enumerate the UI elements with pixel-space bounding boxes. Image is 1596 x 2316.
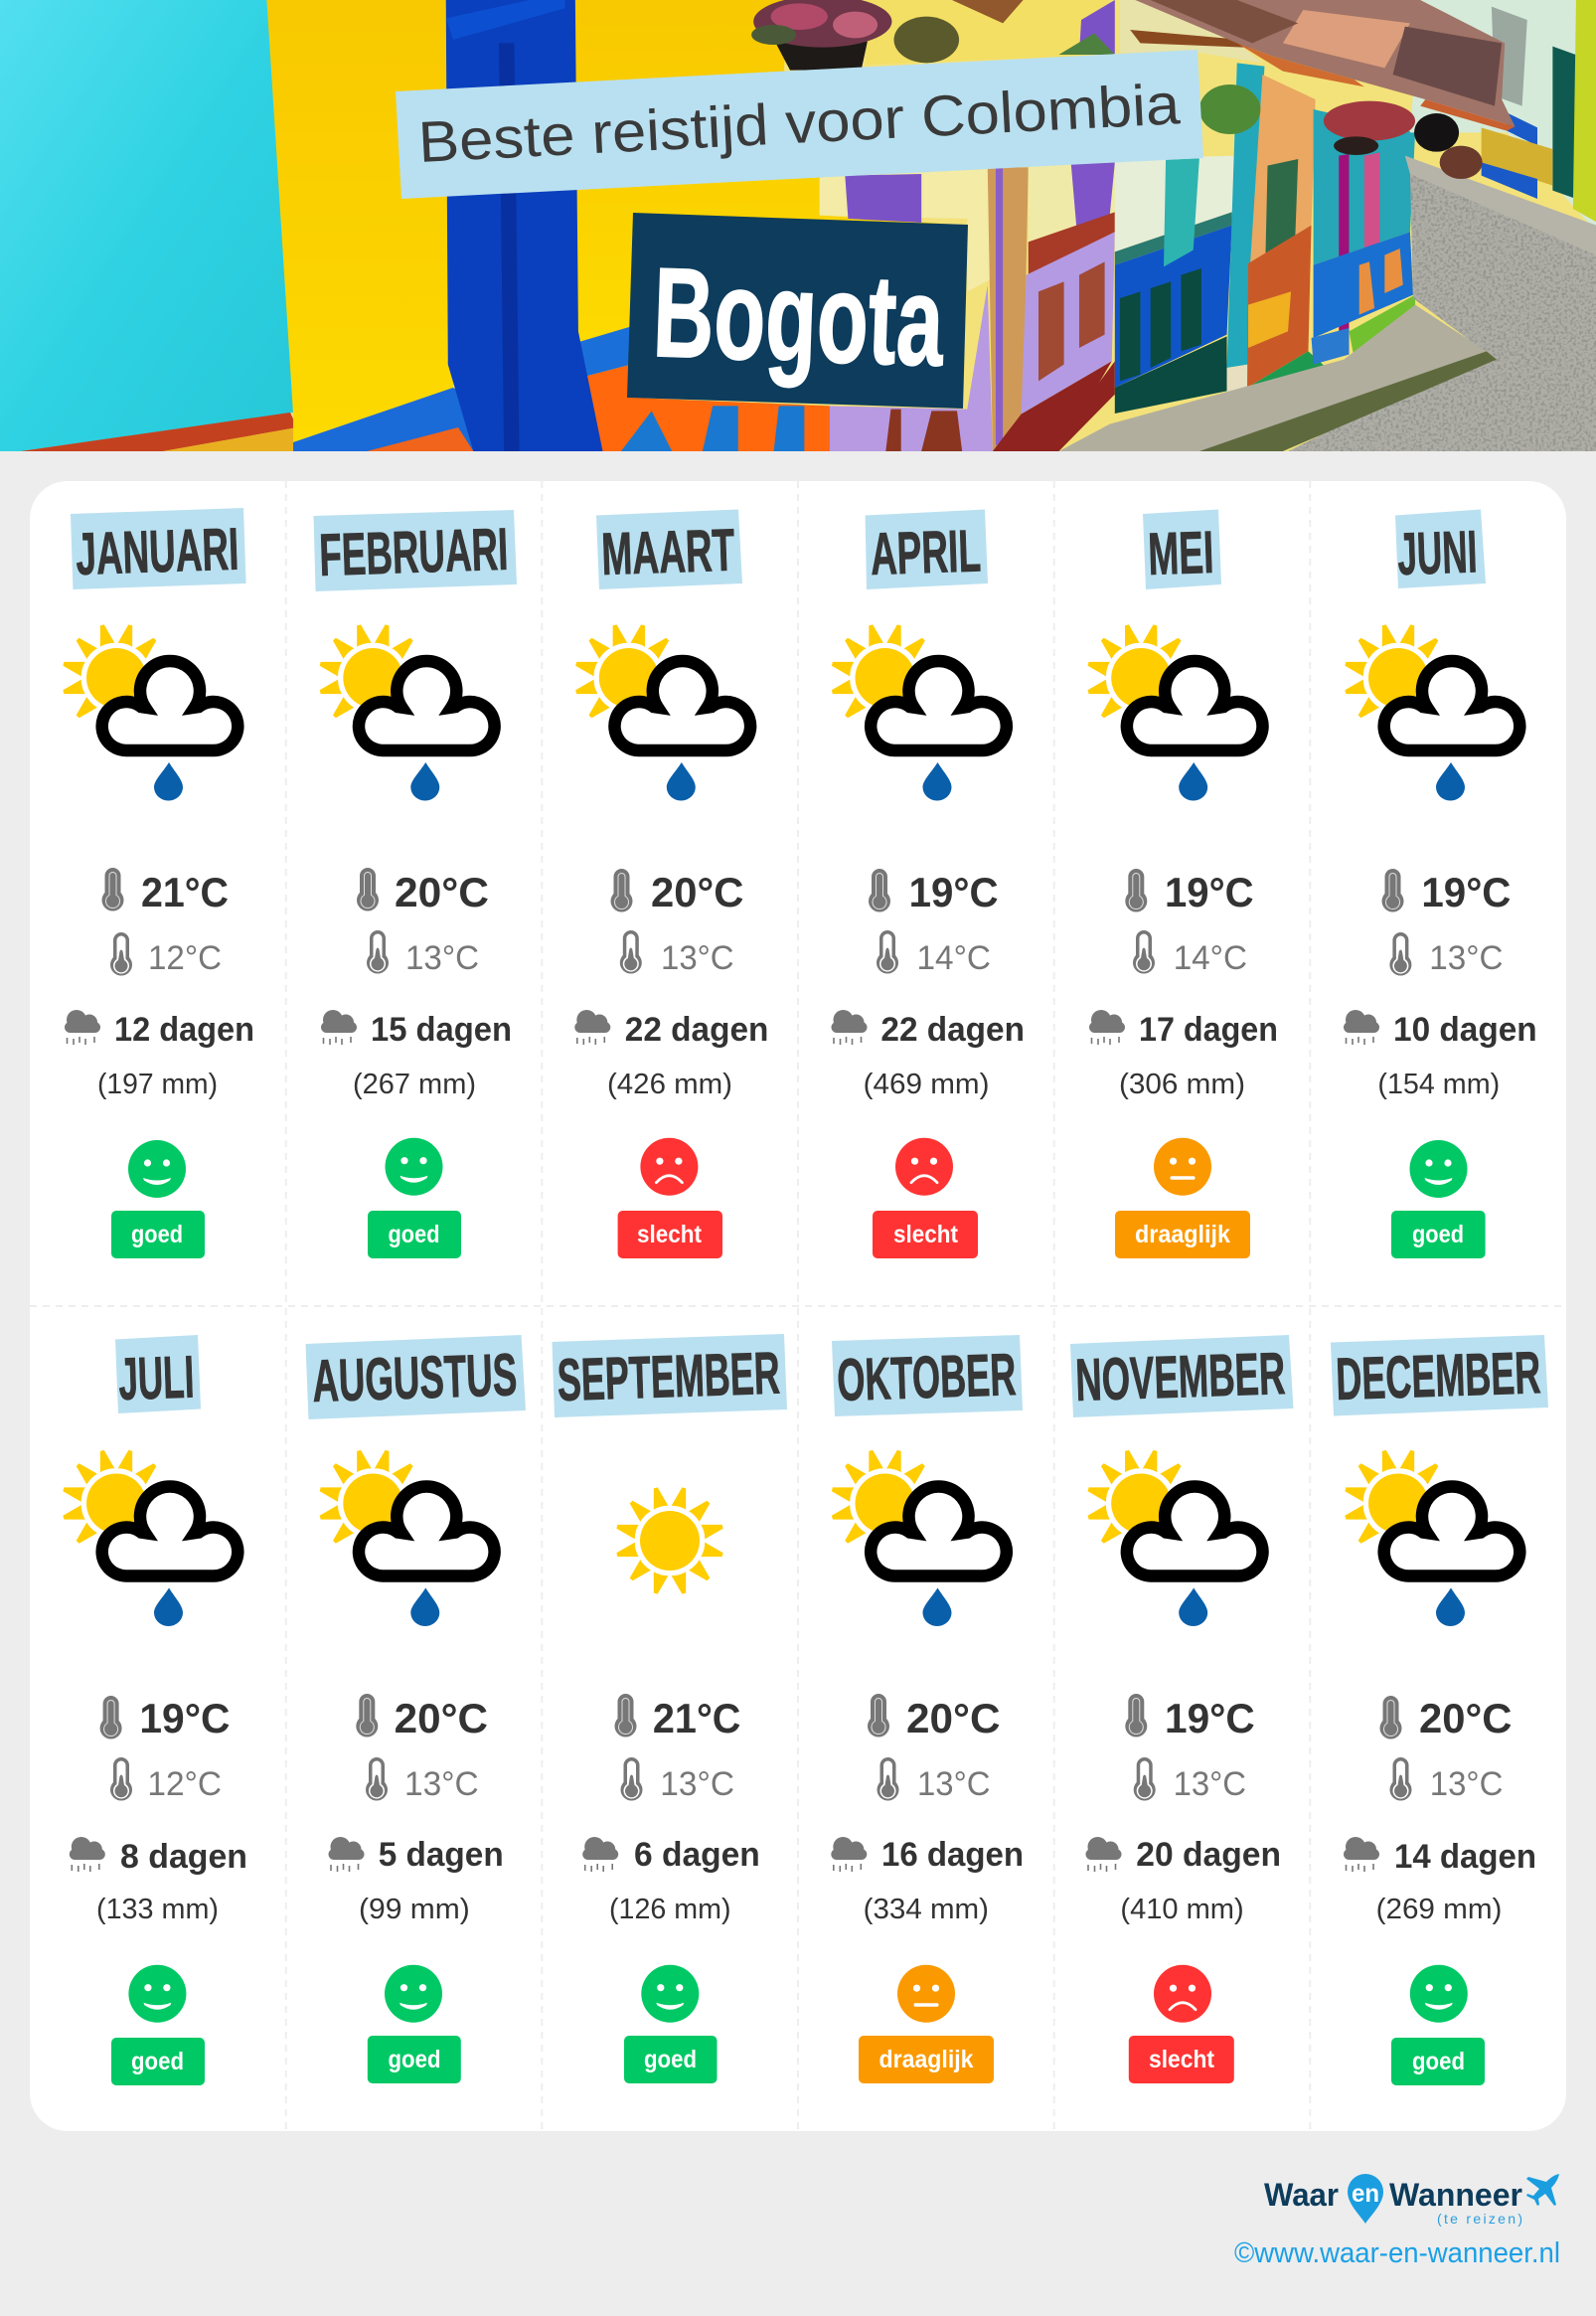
precipitation: (154 mm) [1377,1069,1500,1100]
min temperature: 14°C [1174,939,1247,977]
rain days [1089,1010,1278,1049]
title banner: Bogota [627,213,968,409]
month: april [830,509,1025,1258]
precipitation: (197 mm) [97,1069,218,1100]
max temperature [100,1695,230,1741]
min temperature: 13°C [405,939,479,977]
precipitation: (99 mm) [359,1894,470,1925]
max temperature: 20°C [906,1695,1000,1741]
icon: sun with cloud and drop [1344,1448,1519,1626]
min temperature: 14°C [916,939,991,977]
heading: juli: JULI [117,1344,195,1412]
logo: Waar en Wanneer [1264,2174,1559,2227]
min temperature [1134,1757,1246,1803]
precipitation: (334 mm) [864,1894,989,1925]
logo: Waar en Wanneer: Wanneer [1389,2177,1522,2213]
rating: goed: goed [644,2046,697,2073]
heading: november [1070,1335,1294,1417]
rating: draaglijk: draaglijk [878,2046,974,2073]
icon: sun with cloud and drop [574,623,750,801]
min temperature [877,930,991,977]
month: augustus [306,1335,526,2083]
rating: draaglijk: draaglijk [1135,1221,1230,1248]
min temperature: 13°C [1430,1765,1503,1803]
rating: slecht: slecht [1149,2046,1215,2073]
min temperature [1389,932,1503,977]
heading: april: APRIL [870,517,982,587]
rating: goed [368,1965,461,2083]
rain days: 6 dagen [634,1836,760,1874]
max temperature: 19°C [139,1695,230,1741]
month: november [1070,1335,1294,2083]
rating: slecht: slecht [637,1221,703,1248]
min temperature [367,930,479,977]
max temperature: 20°C [1419,1695,1512,1741]
rating: goed: goed [1412,2048,1465,2075]
rating: slecht [618,1138,722,1258]
rating: slecht [873,1138,978,1258]
rating: goed: goed [131,1221,183,1248]
heading: mei [1143,509,1221,589]
title banner: Bogota: Bogota [651,242,946,394]
heading: augustus [306,1335,526,1419]
rain days: 16 dagen [881,1836,1024,1874]
month: juni [1344,509,1537,1258]
heading: juli [115,1335,201,1413]
icon: sun [615,1486,724,1595]
subtitle banner: Beste reistijd voor Colombia [416,72,1182,175]
rain days: 22 dagen [625,1011,768,1049]
min temperature [110,1757,222,1803]
heading: februari: FEBRUARI [318,516,509,588]
icon: sun with cloud and drop [830,1448,1007,1626]
rating: goed [111,1140,205,1258]
icon: map pin [1348,2174,1383,2224]
logo: Waar en Wanneer: en [1352,2180,1379,2208]
max temperature: 19°C [1421,869,1511,915]
rain days: 14 dagen [1394,1838,1536,1876]
website url: ©www.waar-en-wanneer.nl [1234,2237,1560,2269]
rating: goed [624,1965,718,2083]
max temperature [1381,869,1511,915]
logo: Waar en Wanneer: (te reizen) [1437,2211,1522,2227]
heading: januari [71,508,246,589]
precipitation: (133 mm) [96,1894,219,1925]
heading: mei: MEI [1147,519,1214,587]
rating: goed [1391,1140,1486,1258]
heading: maart: MAART [600,517,735,587]
heading: oktober [832,1335,1023,1416]
precipitation: (269 mm) [1376,1894,1502,1925]
precipitation: (410 mm) [1120,1894,1244,1925]
month: januari [62,508,254,1258]
min temperature [1389,1757,1503,1803]
rain days: 12 dagen [114,1011,254,1049]
max temperature: 19°C [1165,869,1254,915]
rating: slecht [1129,1965,1234,2083]
min temperature [877,1757,990,1803]
heading: maart [596,509,742,589]
heading: juni: JUNI [1396,518,1478,587]
rain days: 10 dagen [1393,1011,1537,1049]
max temperature: 20°C [395,869,489,915]
rain days [65,1010,254,1049]
icon: sun with cloud and drop [1344,623,1519,801]
heading: augustus: AUGUSTUS [311,1341,518,1414]
icon: plane [1526,2174,1559,2206]
rain days: 5 dagen [379,1836,504,1874]
heading: oktober: OKTOBER [836,1341,1017,1413]
heading: september: SEPTEMBER [557,1340,781,1413]
min temperature [110,932,222,977]
heading: januari: JANUARI [75,516,239,587]
max temperature: 19°C [1165,1695,1255,1741]
rating: goed [111,1965,205,2085]
min temperature: 12°C [147,1765,222,1803]
heading: juni [1395,509,1486,588]
rain days: 20 dagen [1136,1836,1281,1874]
subtitle banner [396,50,1203,199]
precipitation: (267 mm) [353,1069,476,1100]
rating: draaglijk [859,1965,994,2083]
panel: months grid [30,481,1566,2131]
heading: november: NOVEMBER [1074,1340,1286,1413]
icon: sun with cloud and drop [62,623,238,801]
rain days: 15 dagen [371,1011,512,1049]
max temperature [1125,1694,1255,1741]
rain days [70,1837,247,1876]
min temperature: 13°C [660,1765,734,1803]
max temperature: 21°C [653,1695,740,1741]
max temperature [356,1694,488,1741]
max temperature [614,1694,740,1741]
icon: sun with cloud and drop [830,623,1007,801]
rating: goed: goed [388,2046,441,2073]
max temperature [101,868,229,915]
icon: sun with cloud and drop [1086,623,1263,801]
min temperature: 13°C [1174,1765,1246,1803]
icon: sun with cloud and drop [318,1448,495,1626]
month: maart [574,509,768,1258]
rating: goed: goed [1412,1221,1464,1248]
rating: goed: goed [131,2048,184,2075]
max temperature [610,869,743,915]
max temperature: 19°C [909,869,999,915]
month: februari [314,510,517,1258]
logo: Waar en Wanneer: Waar [1264,2177,1339,2213]
month: oktober [830,1335,1024,2083]
max temperature [869,869,999,915]
max temperature [1125,869,1254,915]
rating: goed [368,1138,461,1258]
month: juli [62,1335,247,2085]
min temperature [366,1757,479,1803]
precipitation: (426 mm) [607,1069,732,1100]
heading: april [866,509,988,589]
hero photo: colourful Colombian street [0,0,1596,451]
min temperature: 13°C [917,1765,990,1803]
min temperature: 13°C [404,1765,479,1803]
max temperature: 20°C [651,869,743,915]
icon: sun with cloud and drop [318,623,495,801]
rating: slecht: slecht [893,1221,959,1248]
max temperature [868,1694,1000,1741]
month: september [553,1334,787,2083]
min temperature: 13°C [661,939,734,977]
min temperature: 13°C [1429,939,1503,977]
rain days: 17 dagen [1139,1011,1278,1049]
heading: februari [314,510,517,591]
rating: goed: goed [388,1221,439,1248]
icon: sun with cloud and drop [62,1448,238,1626]
min temperature [620,930,734,977]
precipitation: (469 mm) [864,1069,990,1100]
icon: sun with cloud and drop [1086,1448,1263,1626]
month: mei [1086,509,1278,1258]
rating: draaglijk [1115,1138,1250,1258]
precipitation: (306 mm) [1119,1069,1245,1100]
rating: goed [1391,1965,1485,2085]
rain days: 8 dagen [120,1838,247,1876]
min temperature [1133,930,1247,977]
max temperature: 20°C [395,1695,488,1741]
min temperature [620,1757,734,1803]
rain days: 22 dagen [880,1011,1025,1049]
max temperature [357,868,489,915]
month: december [1331,1335,1548,2085]
heading: september [553,1334,787,1417]
min temperature: 12°C [148,939,222,977]
precipitation: (126 mm) [609,1894,731,1925]
max temperature: 21°C [141,869,229,915]
